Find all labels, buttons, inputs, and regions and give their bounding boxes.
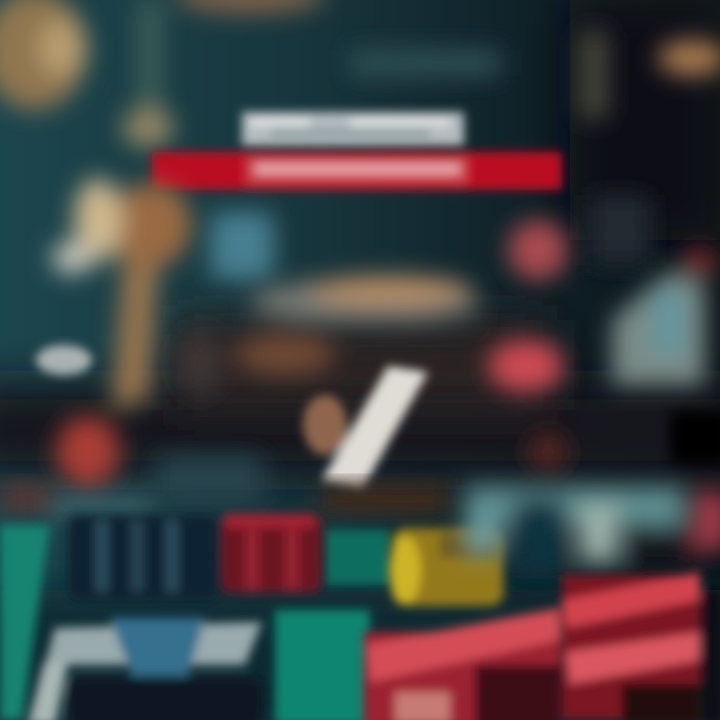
pale teal chip stack on right xyxy=(465,486,720,578)
central plate with food xyxy=(178,276,480,394)
top-right blurred objects xyxy=(350,30,720,265)
blurred title: white lines xyxy=(242,112,464,146)
blue card shape xyxy=(210,212,274,280)
brown table strip xyxy=(0,485,450,513)
bottom-right red chip stacks xyxy=(364,572,720,720)
left small white blob xyxy=(36,345,92,375)
blurred title: red banner xyxy=(152,152,562,190)
dark blue chip stack xyxy=(50,455,265,512)
red chip stack xyxy=(220,514,322,593)
green felt table xyxy=(0,525,390,720)
yellow chip stack xyxy=(389,528,504,606)
right bottle object xyxy=(612,248,718,385)
hand and raised arm xyxy=(52,178,192,488)
bottom-left blue and white chips xyxy=(28,618,263,720)
white card in hand xyxy=(303,366,428,490)
top-left gold ornament xyxy=(0,0,325,148)
right red circles xyxy=(488,220,568,472)
